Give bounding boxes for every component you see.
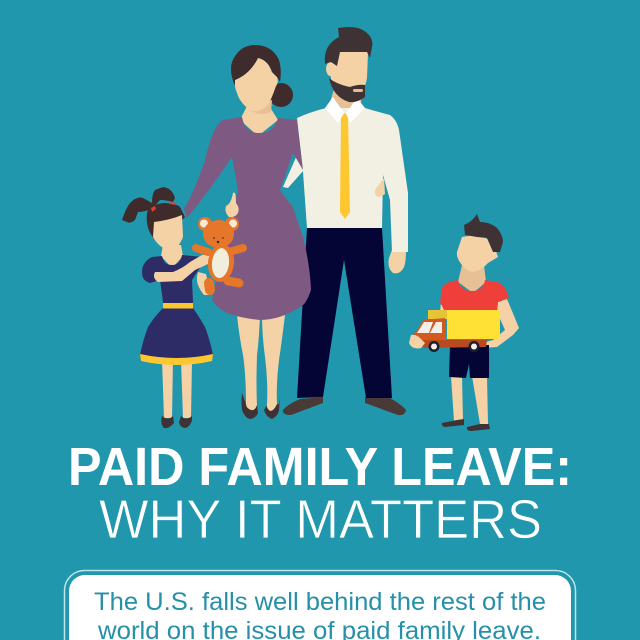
man shoes (283, 397, 406, 415)
panel: intro callout (64, 570, 576, 640)
boy hand (409, 335, 425, 348)
woman bun (269, 83, 293, 107)
girl arm (154, 255, 213, 282)
boy shorts (449, 345, 489, 378)
girl hair (147, 203, 185, 240)
man mouth (353, 89, 363, 92)
man hair (325, 27, 372, 66)
truck cab (413, 318, 445, 343)
girl face (153, 215, 183, 250)
boy shirt (440, 280, 509, 312)
bear limbs (196, 248, 243, 290)
girl shoes (161, 416, 192, 428)
woman face (235, 58, 278, 111)
girl skirt hem (140, 354, 213, 365)
boy legs (451, 376, 488, 424)
truck windows (417, 322, 442, 333)
intro text: The U.S. falls well behind the rest of the (94, 588, 546, 616)
title (68, 437, 572, 550)
man face (330, 52, 368, 100)
illustration: family (122, 27, 519, 431)
icon: toy truck (413, 310, 500, 352)
girl ponytail (122, 187, 175, 223)
girl hair tie (151, 202, 176, 212)
girl belt (163, 303, 193, 308)
truck chassis (417, 340, 487, 348)
woman hand on man's arm (375, 178, 385, 197)
woman neck (240, 104, 278, 136)
title line 1: PAID FAMILY LEAVE: (68, 437, 572, 497)
woman hand (225, 192, 239, 217)
man beard (329, 78, 365, 102)
bear head (203, 220, 234, 248)
figure: girl (122, 187, 213, 428)
boy arms (440, 299, 519, 348)
man trousers (297, 228, 392, 398)
figure: boy (409, 214, 519, 431)
truck wheels (428, 341, 440, 352)
man tie (340, 113, 350, 219)
man ear (326, 62, 335, 76)
title line 2: WHY IT MATTERS (99, 488, 542, 550)
woman neck shadow (248, 100, 272, 114)
man shirt (297, 108, 408, 252)
figure: man (283, 27, 408, 415)
man collar (325, 97, 365, 123)
woman legs (237, 315, 285, 411)
bear belly (210, 247, 231, 279)
bear face (217, 241, 219, 243)
intro text (94, 588, 546, 640)
bear body (206, 243, 236, 283)
panel fill (69, 575, 571, 640)
girl hand (197, 272, 211, 295)
woman dress (184, 117, 311, 320)
panel outline (64, 570, 576, 640)
girl dress (140, 255, 213, 362)
icon: teddy bear (196, 217, 243, 290)
boy shoes (442, 419, 490, 431)
figure: woman (184, 45, 311, 419)
bear ears (198, 217, 212, 231)
man hand (388, 250, 406, 273)
girl legs (162, 360, 192, 418)
woman hair (231, 45, 281, 86)
man neck (328, 85, 362, 122)
boy face (457, 234, 498, 272)
woman shoes (242, 393, 280, 419)
boy neck (458, 265, 486, 293)
man arm behind woman (283, 155, 304, 188)
girl neck (161, 245, 183, 268)
truck cargo box (447, 310, 500, 339)
boy hair (464, 214, 503, 252)
